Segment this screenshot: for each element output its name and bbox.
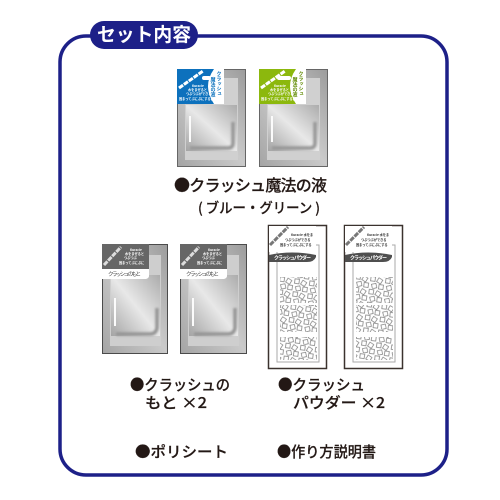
item: crush powder pack 1: Kuracie 水をま (291, 232, 313, 237)
label: magic liquid (174, 172, 327, 218)
label: crush powder x2: パウダー ×2 (293, 392, 385, 413)
label: crush base x2 (130, 374, 230, 413)
item: blue magic liquid pack (177, 69, 246, 166)
item: crush base pack 2 (180, 244, 246, 354)
panel: set contents frame (60, 36, 447, 475)
item: crush base pack 2: 水をまぜると (203, 251, 222, 256)
item: crush base pack 1: Kuracie (130, 247, 142, 252)
item: crush base pack 2: クラッシュのもと (186, 270, 219, 278)
label: poly sheet: ●ポリシート (135, 441, 228, 462)
label: crush base x2: ●クラッシュの (130, 374, 230, 395)
item: crush powder pack 1: つぶつぶができる (285, 237, 310, 242)
item: crush base pack 2: 固まってぷにぷに (197, 260, 222, 265)
label: crush powder x2 (278, 374, 385, 413)
item: crush powder pack 2: Kuracie 水をま (367, 232, 389, 237)
item: blue magic liquid pack: クラッシュ (216, 70, 222, 96)
item: green magic liquid pack: 水をまぜると (270, 87, 289, 92)
item: crush powder pack 2: つぶつぶができる (361, 237, 386, 242)
heading: set contents: セット内容 (97, 20, 191, 47)
item: green magic liquid pack: クラッシュ (298, 70, 304, 96)
label: magic liquid: ●クラッシュ魔法の液 (174, 172, 327, 196)
item: blue magic liquid pack: 魔法の液 (210, 76, 216, 98)
item: crush base pack 1: つぶつぶ (124, 255, 138, 260)
item: blue magic liquid pack: つぶつぶができる (186, 91, 211, 96)
item: crush powder pack 2: 固まってぷにぷにする (356, 242, 388, 247)
item: crush powder pack 1: クラッシュパウダー (274, 254, 311, 262)
label: crush powder x2: ●クラッシュ (278, 374, 365, 395)
label: instructions: ●作り方説明書 (277, 441, 376, 462)
item: crush powder pack 2: クラッシュパウダー (350, 254, 387, 262)
item: green magic liquid pack (259, 69, 328, 166)
item: crush powder pack 1: 固まってぷにぷにする (280, 242, 312, 247)
item: crush powder pack 2 (344, 226, 402, 368)
item: green magic liquid pack: つぶつぶができる (268, 91, 293, 96)
item: crush base pack 1: 水をまぜると (125, 251, 144, 256)
item: crush powder pack 1 (268, 226, 326, 368)
item: crush base pack 1: 固まってぷにぷに (119, 260, 144, 265)
item: blue magic liquid pack: Kuracie (192, 83, 204, 88)
item: green magic liquid pack: 魔法の液 (292, 76, 298, 98)
label: crush base x2: もと ×2 (145, 392, 207, 413)
item: blue magic liquid pack: 固まってぷにぷにするよ (179, 96, 214, 101)
item: crush base pack 2: Kuracie (208, 247, 220, 252)
item: green magic liquid pack: 固まってぷにぷにするよ (261, 96, 296, 101)
item: blue magic liquid pack: 水をまぜると (188, 87, 207, 92)
item: crush base pack 1: クラッシュのもと (108, 270, 141, 278)
label: magic liquid: ( ブルー・グリーン ) (198, 198, 320, 218)
item: crush base pack 1 (102, 244, 168, 354)
item: green magic liquid pack: Kuracie (274, 83, 286, 88)
item: crush base pack 2: つぶつぶ (202, 255, 216, 260)
